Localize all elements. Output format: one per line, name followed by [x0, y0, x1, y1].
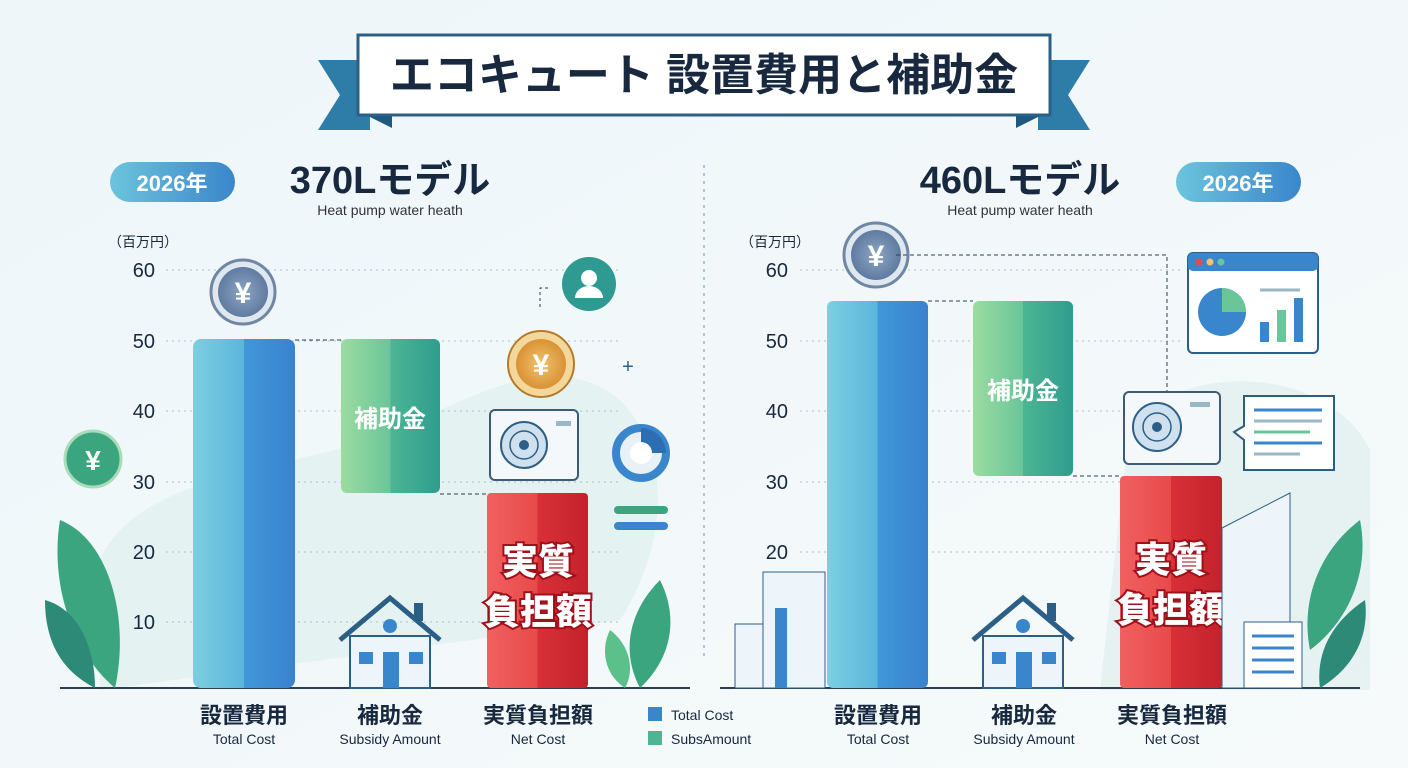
icon: yen coins: ¥ [235, 277, 252, 310]
legend: Total Cost [671, 707, 733, 723]
left axis: 50 [133, 331, 155, 353]
divider [703, 165, 705, 660]
background blobs [100, 377, 1370, 690]
right x labels: 補助金 [991, 703, 1057, 728]
left header: 2026年 [137, 171, 207, 196]
right header: Heat pump water heath [947, 202, 1093, 218]
right bars: 補助金 [987, 378, 1059, 405]
left axis: 20 [133, 542, 155, 564]
left axis: 10 [133, 612, 155, 634]
right axis: （百万円） [740, 234, 810, 250]
left axis [60, 234, 690, 688]
left x labels: Net Cost [511, 731, 565, 747]
right bars: 実質 [1135, 531, 1207, 583]
icon: text document bubble [1234, 396, 1334, 470]
title banner [318, 35, 1090, 130]
right axis: 30 [766, 472, 788, 494]
icon: air conditioner left [490, 410, 578, 480]
right axis: 50 [766, 331, 788, 353]
right bars: 負担額 [1117, 581, 1225, 633]
right header: 2026年 [1203, 171, 1273, 196]
icon: house right [973, 598, 1073, 688]
right axis: 20 [766, 542, 788, 564]
right x labels: Total Cost [847, 731, 909, 747]
icon: yen coins: ¥ [85, 445, 101, 476]
icon: yen coins [65, 223, 1167, 487]
left x labels: Total Cost [213, 731, 275, 747]
icon: dashboard window [1188, 253, 1318, 353]
icon: user: + [622, 356, 634, 378]
left x labels: 設置費用 [200, 703, 288, 728]
left header [110, 159, 490, 218]
right x labels [834, 703, 1227, 747]
icon: house left [340, 598, 440, 688]
icon: user [540, 257, 634, 378]
left axis: 60 [133, 260, 155, 282]
left bars: 実質 [502, 533, 574, 585]
icon: yen coins: ¥ [868, 240, 885, 273]
left axis: 30 [133, 472, 155, 494]
right axis: 40 [766, 401, 788, 423]
icon: air conditioner right [1124, 392, 1220, 464]
left x labels: 補助金 [357, 703, 423, 728]
right axis: 60 [766, 260, 788, 282]
icon: pie chat bubble [614, 428, 668, 530]
right x labels: 実質負担額 [1117, 703, 1227, 728]
left x labels [200, 703, 593, 747]
right bars [827, 301, 1225, 688]
icon: yen coins: ¥ [533, 349, 550, 382]
icon: leaves left [45, 520, 670, 688]
right x labels: Net Cost [1145, 731, 1199, 747]
right axis [720, 234, 1360, 688]
left bars [193, 339, 592, 688]
left x labels: Subsidy Amount [339, 731, 441, 747]
left header: 370Lモデル [290, 159, 490, 202]
left bars: 負担額 [484, 583, 592, 635]
right x labels: 設置費用 [834, 703, 922, 728]
right header: 460Lモデル [920, 159, 1120, 202]
icon: buildings right [735, 493, 1366, 688]
left x labels: 実質負担額 [483, 703, 593, 728]
left header: Heat pump water heath [317, 202, 463, 218]
title banner: エコキュート 設置費用と補助金 [390, 51, 1018, 100]
right x labels: Subsidy Amount [973, 731, 1075, 747]
left axis: （百万円） [108, 234, 178, 250]
left bars: 補助金 [354, 406, 426, 433]
left axis: 40 [133, 401, 155, 423]
legend: SubsAmount [671, 731, 751, 747]
legend [648, 707, 751, 747]
right header [920, 159, 1301, 218]
